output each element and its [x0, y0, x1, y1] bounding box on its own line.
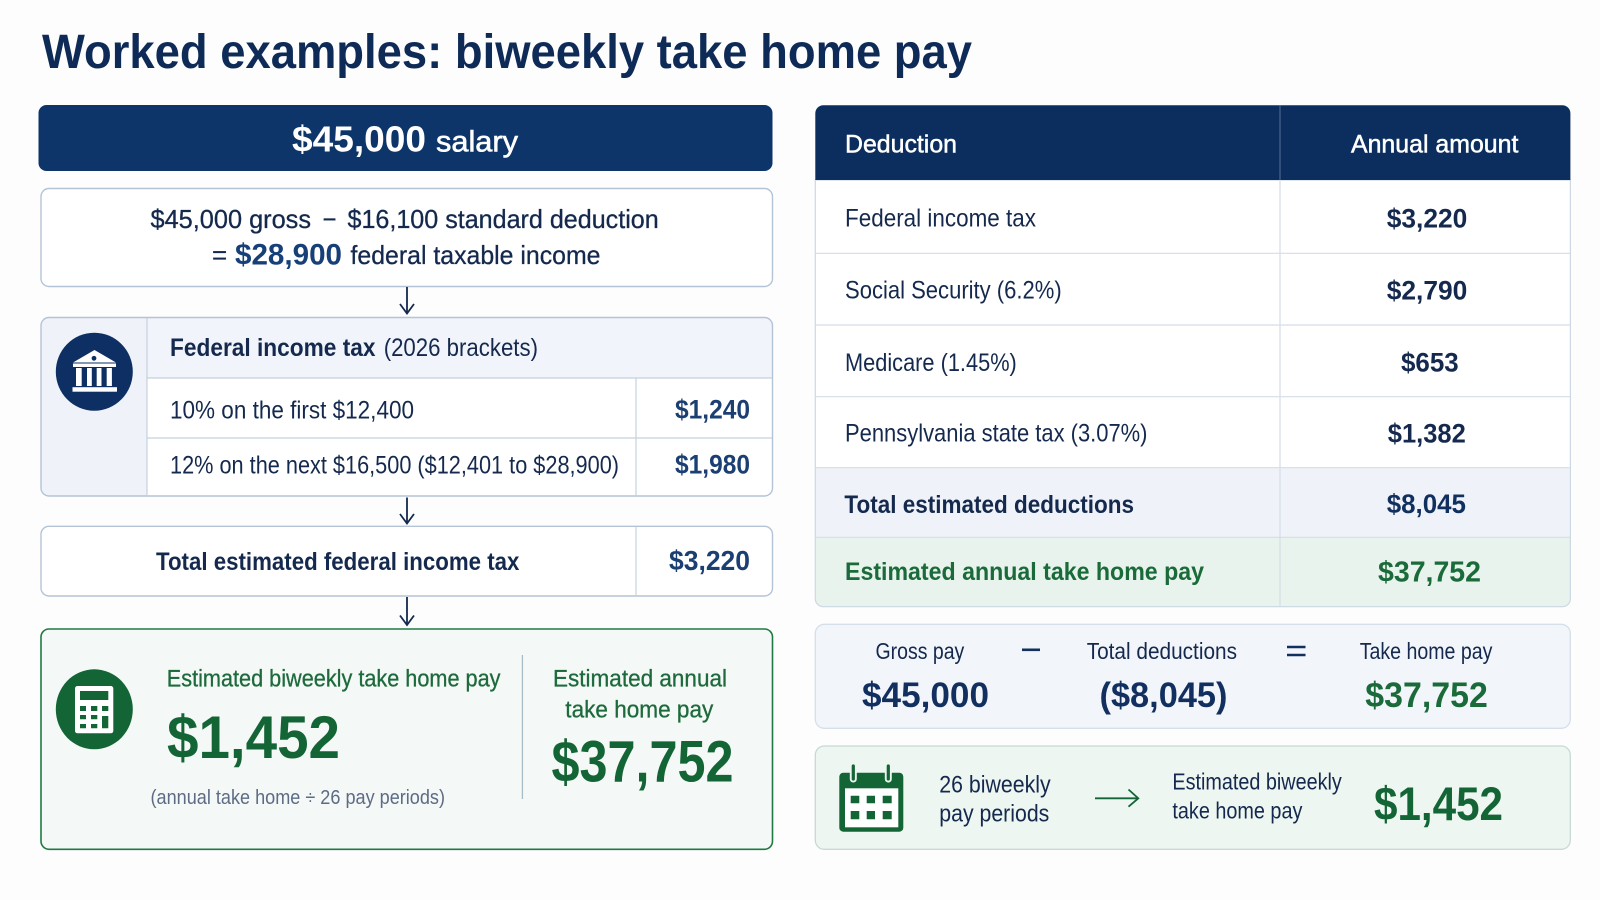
row: pennsylvania state tax: [845, 419, 1466, 449]
taxable income box: $45,000 gross: [150, 204, 311, 234]
federal tax heading: [170, 334, 538, 362]
panel: biweekly conversion: [815, 746, 1570, 849]
arrow: taxable income to federal tax: [400, 287, 414, 314]
row: social security: Social Security (6.2%): [845, 276, 1062, 304]
gross pay: Gross pay: [876, 638, 965, 664]
salary banner: $45,000: [292, 118, 426, 160]
row: federal income tax: $3,220: [1387, 204, 1467, 234]
gross pay: $45,000: [862, 675, 989, 715]
title: Worked examples: biweekly take home pay: [42, 26, 972, 79]
taxable income box: federal taxable income: [350, 240, 600, 270]
gross pay: [862, 638, 989, 715]
icon: calendar: [839, 766, 903, 832]
taxable income box: $28,900: [235, 238, 342, 272]
row: estimated annual take home pay: $37,752: [1378, 556, 1481, 588]
row: medicare: $653: [1401, 348, 1459, 378]
federal tax heading: Federal income tax: [170, 334, 376, 362]
panel: deductions table: [815, 105, 1570, 607]
total federal tax box: Total estimated federal income tax: [156, 548, 519, 576]
total deductions: Total deductions: [1087, 638, 1237, 664]
bracket row: 10 percent: 10% on the first $12,400: [170, 396, 414, 424]
row: total estimated deductions: [844, 489, 1466, 519]
row: estimated annual take home pay: [845, 556, 1481, 588]
arrow: total to take home: [400, 597, 414, 625]
taxable income box: =: [212, 240, 227, 270]
row: medicare: Medicare (1.45%): [845, 349, 1017, 377]
bracket row: 12 percent: $1,980: [675, 449, 750, 479]
salary banner: salary: [436, 126, 518, 158]
biweekly take home figure: $1,452: [167, 704, 340, 771]
take home pay: $37,752: [1365, 675, 1488, 715]
biweekly take home figure: [150, 666, 501, 809]
bracket row: 10 percent: $1,240: [675, 394, 750, 424]
total federal tax box: [41, 526, 772, 596]
biweekly pay label: take home pay: [1172, 797, 1303, 823]
biweekly pay label: Estimated biweekly: [1172, 768, 1342, 794]
icon: calculator: [56, 669, 133, 749]
pay periods label: [939, 772, 1051, 828]
biweekly pay value: $1,452: [1374, 777, 1503, 830]
row: estimated annual take home pay: Estimated annual take home pay: [845, 558, 1204, 586]
panel: take home result: [41, 629, 772, 849]
panel: federal income tax brackets: [41, 318, 772, 496]
table header: Annual amount: [1351, 130, 1518, 158]
row: social security: [845, 275, 1467, 305]
table header: [815, 105, 1570, 180]
row: pennsylvania state tax: Pennsylvania state tax (3.07%): [845, 420, 1148, 448]
taxable income box: −: [322, 204, 336, 234]
row: medicare: [845, 348, 1459, 378]
total deductions: ($8,045): [1100, 675, 1228, 715]
federal tax heading: (2026 brackets): [384, 334, 538, 362]
bracket row: 12 percent: 12% on the next $16,500 ($12,401 to $28,900): [170, 451, 619, 479]
icon: bank: [56, 333, 133, 411]
arrow: periods to biweekly pay: [1095, 790, 1138, 807]
panel: worked example flow: [38, 105, 772, 849]
take home pay: [1360, 638, 1493, 715]
annual take home figure: [552, 666, 734, 795]
total federal tax box: $3,220: [669, 545, 750, 576]
row: federal income tax: Federal income tax: [845, 205, 1036, 233]
equals sign: [1287, 647, 1306, 655]
arrow: brackets to total: [400, 498, 414, 524]
total deductions: [1087, 638, 1237, 715]
pay periods label: pay periods: [939, 801, 1049, 828]
pay periods label: 26 biweekly: [939, 772, 1051, 799]
taxable income box: [41, 188, 772, 286]
bracket row: 10 percent: [170, 394, 750, 424]
annual take home figure: $37,752: [552, 730, 734, 795]
row: federal income tax: [845, 204, 1467, 234]
taxable income box: $16,100 standard deduction: [348, 204, 659, 234]
biweekly take home figure: Estimated biweekly take home pay: [167, 666, 501, 693]
row: total estimated deductions: $8,045: [1387, 489, 1466, 519]
annual take home figure: Estimated annual: [553, 666, 727, 693]
take home pay: Take home pay: [1360, 638, 1493, 664]
biweekly pay label: [1172, 768, 1342, 823]
biweekly take home figure: (annual take home ÷ 26 pay periods): [150, 786, 445, 809]
salary banner: [38, 105, 772, 171]
annual take home figure: take home pay: [565, 697, 714, 724]
table header: Deduction: [845, 130, 957, 158]
row: total estimated deductions: Total estimated deductions: [844, 491, 1134, 519]
panel: take home formula: [815, 624, 1570, 728]
minus sign: [1022, 648, 1040, 651]
row: social security: $2,790: [1387, 275, 1467, 305]
row: pennsylvania state tax: $1,382: [1388, 419, 1466, 449]
